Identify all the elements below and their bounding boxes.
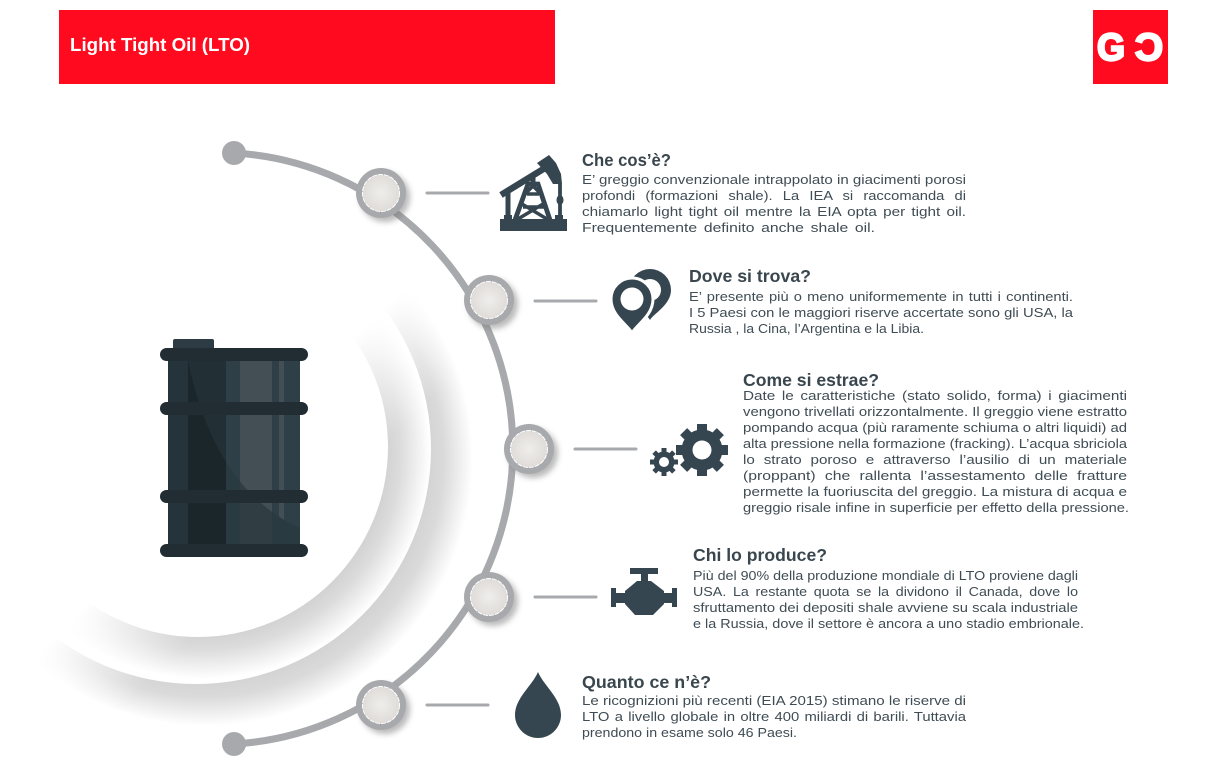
heading: Come si estrae?: [743, 370, 879, 390]
body text: E’ greggio convenzionale intrappolato in giacimenti porosi: [582, 172, 966, 187]
body text: E’ presente più o meno uniformemente in tutti i continenti.: [689, 289, 1073, 304]
heading: Chi lo produce?: [693, 545, 827, 565]
node 1: [356, 168, 410, 222]
icon: gears: [650, 424, 728, 476]
body text: greggio risale infine in superficie per effetto della pressione.: [743, 500, 1129, 515]
icon: pumpjack: [500, 155, 567, 231]
icon: oil drop: [515, 672, 561, 738]
logo: [1093, 10, 1168, 84]
node 4: [464, 572, 518, 626]
body text: [582, 172, 966, 235]
body text: USA. La restante quota se la dividono il Canada, dove lo: [693, 584, 1078, 599]
connector lines: [427, 193, 636, 705]
body text: Russia , la Cina, l’Argentina e la Libia.: [689, 321, 924, 336]
body text: (proppant) che rallenta l’assestamento delle fratture: [743, 468, 1127, 483]
icon: valve: [611, 568, 677, 615]
body text: lo strato poroso e attraverso l’ausilio di un materiale: [743, 452, 1127, 467]
body text: profondi (formazioni shale). La IEA si raccomanda di: [582, 188, 966, 203]
body text: [693, 568, 1084, 631]
icon: map pins: [611, 269, 671, 333]
logo: G: [1097, 27, 1125, 69]
body text: I 5 Paesi con le maggiori riserve accertate sono gli USA, la: [689, 305, 1074, 320]
body text: chiamarlo light tight oil mentre la EIA opta per tight oil.: [582, 204, 966, 219]
background discs: [69, 322, 466, 720]
node 5: [356, 680, 410, 734]
node 2: [464, 275, 518, 329]
heading: Dove si trova?: [689, 266, 811, 286]
header banner: [59, 10, 555, 84]
body text: Date le caratteristiche (stato solido, forma) i giacimenti: [743, 388, 1127, 403]
body text: pompando acqua (più raramente schiuma o altri liquidi) ad: [743, 420, 1127, 435]
body text: Più del 90% della produzione mondiale di LTO proviene dagli: [693, 568, 1078, 583]
timeline arc: [222, 141, 513, 756]
body text: alta pressione nella formazione (fracking). L’acqua sbriciola: [743, 436, 1128, 451]
body text: sfruttamento dei depositi shale avviene su scala industriale: [693, 600, 1078, 615]
body text: [743, 388, 1129, 515]
section: Che cos'è?: [582, 150, 966, 235]
body text: LTO a livello globale in oltre 400 miliardi di barili. Tuttavia: [582, 709, 967, 724]
body text: vengono trivellati orizzontalmente. Il greggio viene estratto: [743, 404, 1127, 419]
title: Light Tight Oil (LTO): [70, 34, 250, 55]
body text: Frequentemente definito anche shale oil.: [582, 220, 875, 235]
body text: Le ricognizioni più recenti (EIA 2015) stimano le riserve di: [582, 693, 966, 708]
logo: C: [1135, 27, 1163, 69]
body text: e la Russia, dove il settore è ancora a uno stadio embrionale.: [693, 616, 1084, 631]
body text: [582, 693, 967, 740]
body text: [689, 289, 1074, 336]
section: Come si estrae?: [743, 370, 1129, 515]
icon: oil barrel: [160, 339, 308, 557]
body text: permette la fuoriuscita del greggio. La mistura di acqua e: [743, 484, 1127, 499]
body text: prendono in esame solo 46 Paesi.: [582, 725, 797, 740]
section: Quanto ce n'è?: [582, 672, 967, 740]
heading: Quanto ce n’è?: [582, 672, 711, 692]
section: Chi lo produce?: [693, 545, 1084, 631]
node 3: [504, 424, 558, 478]
heading: Che cos’è?: [582, 150, 671, 170]
section: Dove si trova?: [689, 266, 1074, 336]
